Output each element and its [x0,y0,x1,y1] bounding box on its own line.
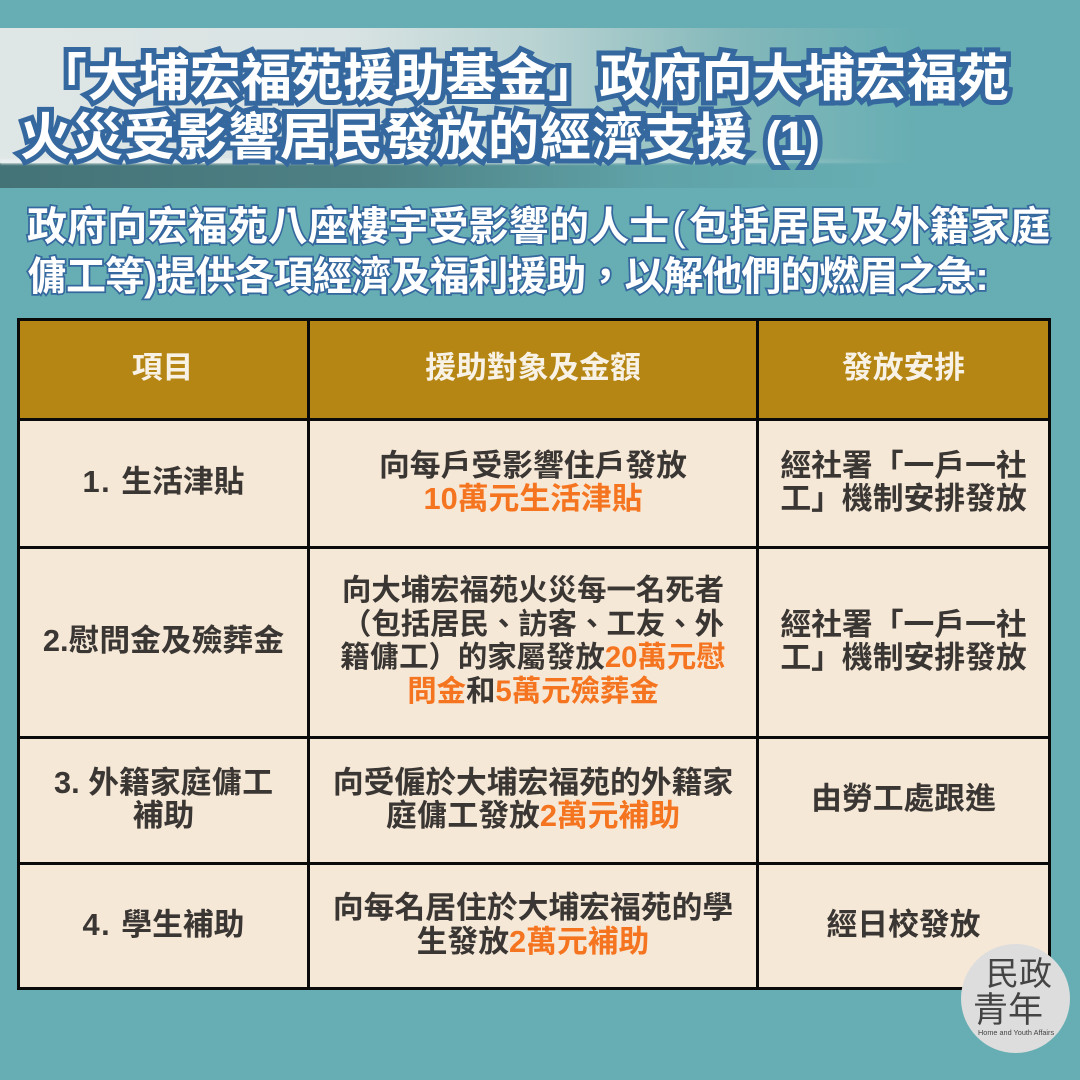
row 4 amount [333,890,733,958]
row 1 amount: 10萬元生活津貼 [423,481,643,516]
intro text: 傭工等)提供各項經濟及福利援助，以解他們的燃眉之急: [27,255,988,299]
row 2 amount [340,574,726,708]
title [12,45,1013,170]
row 3 item: 3. 外籍家庭傭工 [54,764,273,800]
row 3 item [54,764,273,833]
row 4 amount: 向每名居住於大埔宏福苑的學 [333,890,733,925]
row 3 amount [333,764,733,833]
row 4 item: 4. 學生補助 [83,907,244,942]
title: 火災受影響居民發放的經濟支援 (1) [20,109,818,166]
row 3 amount: 向受僱於大埔宏福苑的外籍家 [333,764,733,800]
intro text: 政府向宏福苑八座樓宇受影響的人士(包括居民及外籍家庭 [27,205,1050,249]
intro text [26,203,1052,300]
row 1 arrangement [780,448,1027,516]
row 1 item: 1. 生活津貼 [83,464,244,499]
title banner [0,28,886,188]
header: recipients and amount: 援助對象及金額 [425,350,641,385]
row 2 amount: （包括居民、訪客、工友、外 [342,608,724,640]
logo: 青年 [973,982,1043,1033]
row 3 amount: 庭傭工發放2萬元補助 [386,798,680,833]
row 2 amount: 籍傭工）的家屬發放20萬元慰 [340,641,726,674]
row 3 item: 補助 [133,798,194,833]
row 1 arrangement: 工」機制安排發放 [780,481,1027,516]
logo [961,944,1070,1053]
row 1 arrangement: 經社署「一戶一社 [780,448,1027,482]
row 4 arrangement: 經日校發放 [826,907,980,942]
row 2 arrangement: 經社署「一戶一社 [780,606,1027,642]
row 1 amount: 向每戶受影響住戶發放 [379,448,687,482]
logo: 民政 [986,947,1052,995]
row 2 amount: 問金和5萬元殮葬金 [407,674,659,708]
title: 「大埔宏福苑援助基金」政府向大埔宏福苑 [36,50,1009,107]
row 2 item: 2.慰問金及殮葬金 [43,623,284,658]
row 2 arrangement [780,606,1027,675]
row 2 amount: 向大埔宏福苑火災每一名死者 [342,574,724,607]
header: item: 項目 [132,350,193,385]
row 3 arrangement: 由勞工處跟進 [811,781,996,816]
table [17,318,1051,990]
row 2 arrangement: 工」機制安排發放 [780,640,1027,675]
row 1 amount [379,448,687,516]
logo: Home and Youth Affairs [978,1028,1054,1037]
row 4 amount: 生發放2萬元補助 [417,924,649,958]
header: arrangement: 發放安排 [842,350,965,385]
